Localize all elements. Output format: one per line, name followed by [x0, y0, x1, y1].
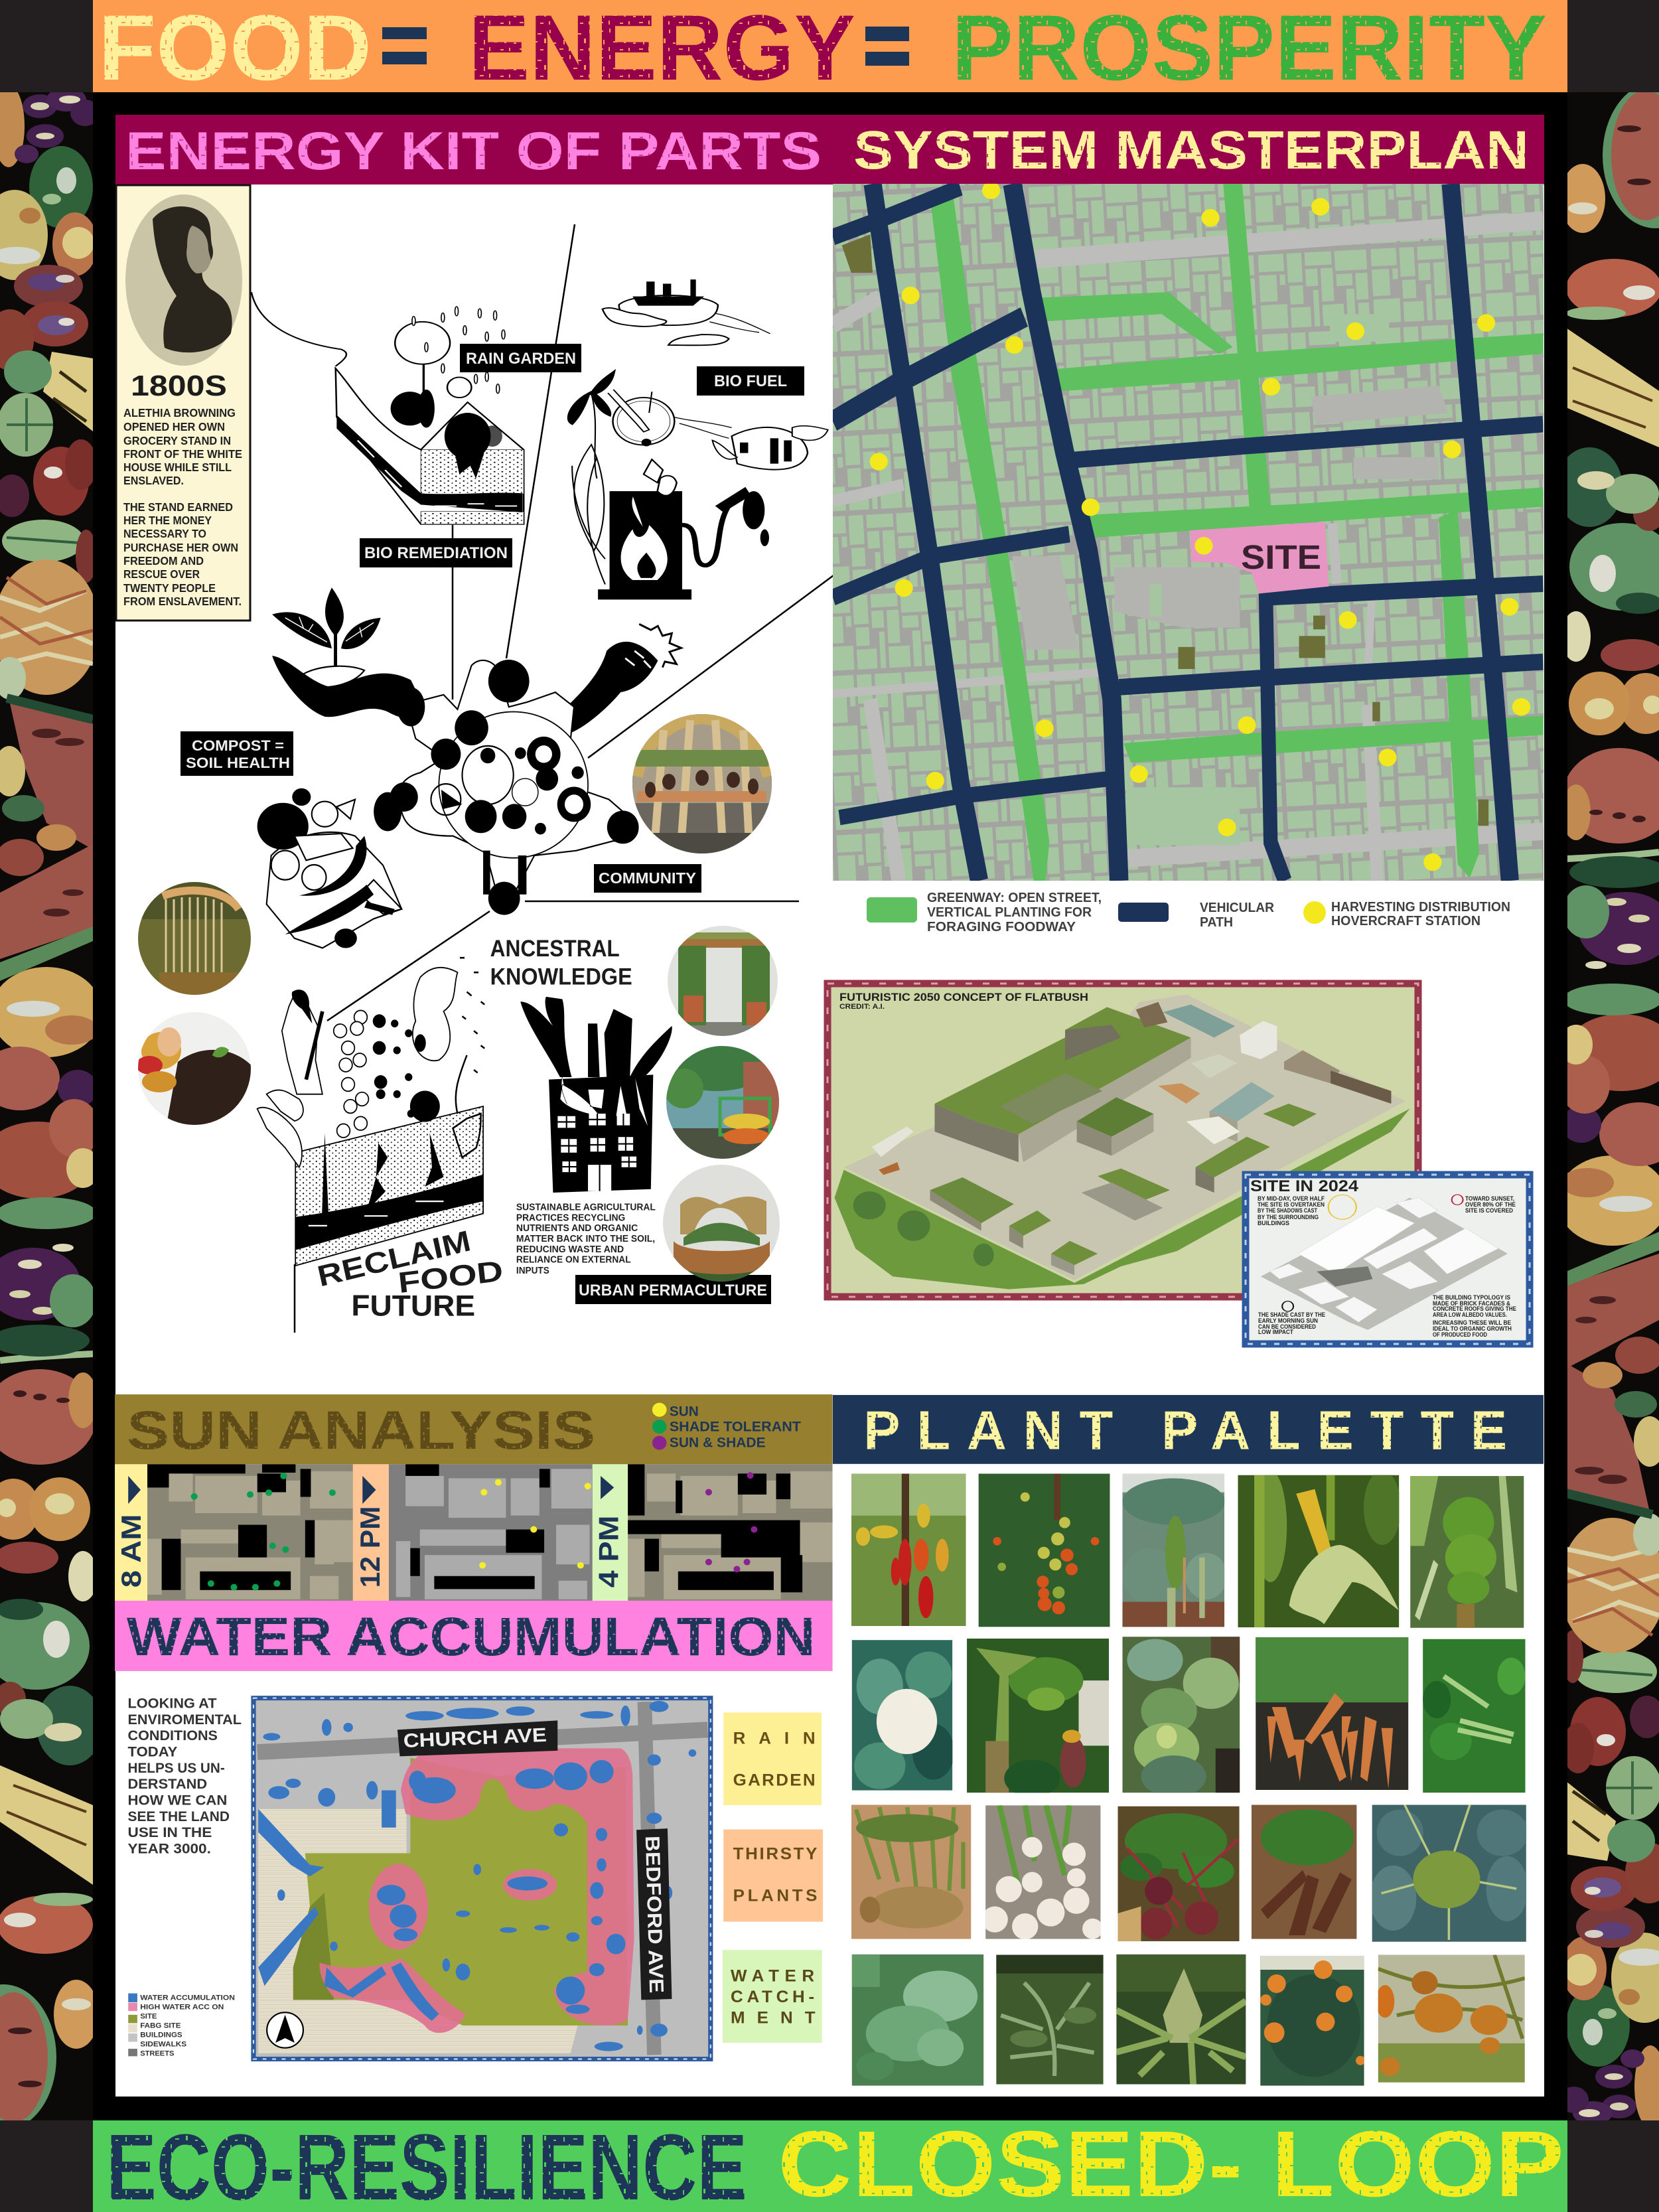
vehicular legend text: [1200, 901, 1275, 930]
vehicular legend text: PATH: [1200, 915, 1233, 930]
photo: cauliflower: [852, 1640, 953, 1791]
label: community: COMMUNITY: [599, 869, 696, 887]
tag: water catchment: CATCH-: [731, 1988, 814, 2006]
photo: banana tree: [967, 1639, 1109, 1793]
paragraph: sustainable agricultural practices: RELIANCE ON EXTERNAL: [516, 1254, 631, 1266]
greenway legend text: VERTICAL PLANTING FOR: [927, 905, 1092, 920]
paragraph: environmental conditions: ENVIROMENTAL: [128, 1712, 242, 1728]
date heading: 1800S: [131, 370, 227, 402]
label: rain garden: RAIN GARDEN: [466, 350, 576, 368]
inset annotations: BY THE SHADOWS CAST: [1258, 1207, 1317, 1215]
inset annotations: THE BUILDING TYPOLOGY IS: [1433, 1294, 1510, 1301]
station swatch: [1303, 901, 1326, 924]
label: bio remediation: BIO REMEDIATION: [364, 544, 508, 562]
tag: thirsty plants: PLANTS: [733, 1887, 817, 1905]
vehicular paths: [833, 184, 1543, 881]
inset annotations: BY MID-DAY, OVER HALF: [1258, 1195, 1325, 1203]
photo: peppers: [851, 1473, 966, 1626]
label: urban permaculture: URBAN PERMACULTURE: [579, 1282, 767, 1299]
flying planter: [603, 279, 770, 345]
plant palette header: PLANT PALETTE: [863, 1399, 1507, 1461]
photo: green beans: [1423, 1639, 1525, 1793]
paragraph: sustainable agricultural practices: [516, 1202, 656, 1276]
hovercraft: [674, 417, 828, 470]
photo: cilantro: [852, 1954, 983, 2086]
reclaim soil section: [257, 958, 484, 1266]
equals sign 1: [382, 27, 427, 64]
heading: energy kit of parts: ENERGY KIT OF PARTS: [125, 121, 822, 181]
hovercraft stations: [870, 182, 1530, 871]
heading: system masterplan: SYSTEM MASTERPLAN: [853, 120, 1529, 181]
history text: ALETHIA BROWNING: [123, 406, 236, 419]
paragraph: environmental conditions: SEE THE LAND: [128, 1808, 230, 1824]
photo: woven pavilion: [660, 1161, 783, 1284]
water accumulation header: WATER ACCUMULATION: [127, 1607, 816, 1667]
photo: compost soil: [138, 1012, 251, 1125]
photo: tomatoes: [978, 1473, 1110, 1627]
sun legend: [652, 1403, 801, 1450]
inset annotations: SITE IS COVERED: [1465, 1207, 1513, 1215]
water legend: SIDEWALKS: [140, 2041, 187, 2049]
site parcel: [1190, 522, 1329, 593]
sun legend: SUN: [670, 1404, 699, 1419]
tag: water catchment: M E N T: [731, 2009, 816, 2027]
portrait of Alethia Browning: [125, 194, 242, 366]
inset annotations: CONCRETE ROOFS GIVING THE: [1433, 1305, 1516, 1313]
tag: rain garden: GARDEN: [733, 1771, 816, 1789]
time tab: 8 AM: [115, 1464, 147, 1601]
greenways: [931, 184, 1543, 881]
water legend: BUILDINGS: [140, 2031, 182, 2039]
street label: bedford ave: [636, 1828, 672, 2000]
tag: thirsty plants: [723, 1830, 823, 1921]
photo: cannabis: [1116, 1954, 1246, 2085]
paragraph: environmental conditions: HOW WE CAN: [128, 1793, 227, 1808]
hand holding seedling: [272, 587, 425, 718]
photo: cassava: [1252, 1805, 1356, 1939]
inset title: SITE IN 2024: [1250, 1177, 1359, 1195]
water legend: SITE: [140, 2013, 157, 2020]
panel: site in 2024 inset: [1246, 1175, 1530, 1344]
tag: rain garden: R A I N: [733, 1730, 816, 1747]
concept image caption: [839, 991, 1088, 1011]
history text: OPENED HER OWN: [123, 420, 225, 433]
history text: FROM ENSLAVEMENT.: [123, 595, 242, 608]
photo: ginger: [851, 1805, 972, 1939]
history text: FRONT OF THE WHITE: [123, 447, 242, 461]
photo: citrus: [1260, 1956, 1365, 2086]
tag: water catchment: WATER: [731, 1967, 814, 1985]
reclaim food future lettering: FOOD: [397, 1255, 504, 1299]
label: bio fuel: BIO FUEL: [714, 372, 787, 390]
history text: NECESSARY TO: [123, 527, 206, 540]
label: bio fuel: [697, 366, 804, 396]
white content panel: [115, 184, 1544, 2097]
ancestral knowledge lettering: [490, 936, 632, 990]
illustrations: community table, hands, compost and reclaim: [257, 587, 681, 1323]
history text: RESCUE OVER: [123, 567, 200, 581]
photo: green bananas: [1410, 1476, 1524, 1628]
illustration: rain garden block: [252, 292, 524, 524]
panel: plant palette: [833, 1395, 1544, 2086]
label: compost = soil health: [180, 731, 293, 776]
greenway legend text: GREENWAY: OPEN STREET,: [927, 891, 1102, 905]
water legend: FABG SITE: [140, 2022, 181, 2029]
inset annotations: TOWARD SUNSET,: [1465, 1195, 1514, 1203]
history text: HOUSE WHILE STILL: [123, 461, 232, 474]
water accumulation spots: [258, 1701, 696, 2051]
paragraph: environmental conditions: TODAY: [128, 1744, 177, 1759]
high water areas: [319, 1748, 634, 2033]
concept image caption: FUTURISTIC 2050 CONCEPT OF FLATBUSH: [839, 991, 1088, 1003]
photo: rosemary: [996, 1954, 1104, 2085]
site label: SITE: [1241, 538, 1321, 576]
inset annotations: CAN BE CONSIDERED: [1258, 1323, 1316, 1331]
farmer figure: [282, 990, 323, 1094]
history text: ENSLAVED.: [123, 474, 184, 487]
paragraph: environmental conditions: HELPS US UN-: [128, 1760, 225, 1776]
paragraph: environmental conditions: CONDITIONS: [128, 1728, 218, 1743]
water legend: [128, 1994, 235, 2058]
concept image caption: CREDIT: A.I.: [839, 1003, 885, 1011]
fist raised with fork: [546, 624, 681, 736]
time tab: 4 PM: 4 PM: [593, 1516, 624, 1587]
inset annotations: BUILDINGS: [1258, 1220, 1289, 1227]
panel: 1800s history card: [116, 185, 250, 621]
time tab: 4 PM: [593, 1464, 628, 1601]
photo: street market: [664, 1045, 783, 1161]
label: bio remediation: [360, 538, 512, 567]
reclaim food future lettering: FUTURE: [351, 1290, 475, 1323]
fabric strip: left fruit pattern: [0, 85, 103, 2130]
planted rows: [257, 968, 457, 1167]
time tab: 8 AM: 8 AM: [115, 1514, 147, 1587]
tag: rain garden: [723, 1712, 822, 1805]
top banner: [93, 0, 1567, 100]
compass north arrow: [267, 2012, 303, 2048]
paragraph: environmental conditions: YEAR 3000.: [128, 1841, 211, 1856]
paragraph: sustainable agricultural practices: INPUTS: [516, 1266, 549, 1276]
photo: beets: [1118, 1806, 1240, 1941]
shadow map: 4 PM: [628, 1464, 833, 1601]
community table with people: [374, 660, 639, 915]
inset annotations: BY THE SURROUNDING: [1258, 1214, 1319, 1221]
inset annotations: THE SHADE CAST BY THE: [1258, 1311, 1325, 1319]
dark olive lots: [842, 234, 1488, 826]
inset annotations: EARLY MORNING SUN: [1258, 1317, 1318, 1325]
history text: FREEDOM AND: [123, 554, 204, 567]
paragraph: sustainable agricultural practices: PRACTICES RECYCLING: [516, 1213, 625, 1224]
water legend: STREETS: [140, 2050, 175, 2058]
paragraph: sustainable agricultural practices: SUSTAINABLE AGRICULTURAL: [516, 1202, 656, 1213]
sun legend: SHADE TOLERANT: [670, 1419, 801, 1434]
bottom banner: [93, 2111, 1567, 2212]
sun analysis header: SUN ANALYSIS: [127, 1400, 595, 1461]
tag: water catchment: [723, 1950, 822, 2043]
water legend: HIGH WATER ACC ON: [140, 2004, 224, 2011]
street label: church ave: CHURCH AVE: [403, 1724, 547, 1752]
label: rain garden: [460, 344, 581, 372]
inset annotations: THE SITE IS OVERTAKEN: [1258, 1201, 1325, 1209]
photo: community dome: [630, 713, 776, 859]
tag: thirsty plants: THIRSTY: [733, 1845, 817, 1863]
photo: squash: [1376, 1954, 1525, 2083]
water legend: WATER ACCUMULATION: [140, 1994, 235, 2002]
inset annotations: AREA LOW ALBEDO VALUES.: [1433, 1311, 1507, 1319]
fabric strip: right fruit pattern: [1556, 82, 1659, 2128]
greenway swatch: [867, 897, 917, 922]
inset annotations: IDEAL TO ORGANIC GROWTH: [1433, 1325, 1512, 1333]
sun legend: SUN & SHADE: [670, 1435, 766, 1450]
label: compost = soil health: SOIL HEALTH: [186, 755, 290, 771]
sun analysis header: [115, 1394, 833, 1464]
panel: futuristic 2050 concept image: [828, 984, 1418, 1297]
photo: vegetable arch: [667, 926, 780, 1042]
panel: sun analysis and water accumulation: [115, 1394, 833, 2059]
photo: cabbage: [1123, 1637, 1240, 1793]
greenway legend text: FORAGING FOODWAY: [927, 920, 1076, 934]
history text: TWENTY PEOPLE: [123, 581, 216, 595]
illustration: building bag with vegetables: [520, 997, 672, 1193]
history text: PURCHASE HER OWN: [123, 541, 238, 554]
inset annotations: LOW IMPACT: [1258, 1329, 1293, 1336]
shadow map: 12 PM: [389, 1464, 593, 1601]
history text: [123, 406, 242, 608]
section header band: [115, 115, 1544, 184]
equals sign 2: [865, 27, 909, 66]
time tab: 12 PM: 12 PM: [355, 1506, 386, 1587]
connector lines: [295, 224, 833, 1333]
photo: broccoli: [1370, 1805, 1528, 1942]
inset annotations: OF PRODUCED FOOD: [1433, 1331, 1487, 1339]
paragraph: environmental conditions: USE IN THE: [128, 1824, 212, 1840]
ancestral knowledge lettering: KNOWLEDGE: [490, 964, 632, 990]
paragraph: environmental conditions: DERSTAND: [128, 1776, 207, 1792]
isometric green city: [835, 994, 1410, 1290]
inset annotations: OVER 80% OF THE: [1465, 1201, 1516, 1209]
station legend text: [1331, 900, 1510, 928]
photo: carrots: [1256, 1637, 1408, 1790]
time tab: 12 PM: [353, 1464, 389, 1601]
vehicular swatch: [1118, 903, 1169, 922]
history text: GROCERY STAND IN: [123, 434, 231, 447]
water accumulation map: [253, 1698, 711, 2059]
light streets and courtyards: [833, 220, 1543, 881]
history text: THE STAND EARNED: [123, 500, 233, 514]
paragraph: environmental conditions: LOOKING AT: [128, 1696, 217, 1711]
greenway legend text: [927, 891, 1102, 934]
inset annotations: [1258, 1195, 1516, 1339]
photo: woven comb planter: [138, 882, 251, 995]
map legend: [867, 891, 1510, 934]
paragraph: sustainable agricultural practices: MATTER BACK INTO THE SOIL,: [516, 1234, 655, 1244]
isometric existing site: [1261, 1195, 1508, 1330]
paragraph: sustainable agricultural practices: NUTRIENTS AND ORGANIC: [516, 1223, 638, 1234]
shadow map: 8 AM: [147, 1464, 353, 1601]
paragraph: environmental conditions: [128, 1696, 242, 1856]
label: urban permaculture: [575, 1275, 771, 1304]
photo: brussels sprouts: [1123, 1473, 1225, 1627]
label: compost = soil health: COMPOST =: [192, 737, 284, 754]
street label: bedford ave: BEDFORD AVE: [641, 1836, 668, 1994]
station legend text: HARVESTING DISTRIBUTION: [1331, 900, 1510, 915]
street label: church ave: [397, 1720, 557, 1756]
paragraph: sustainable agricultural practices: REDUCING WASTE AND: [516, 1244, 624, 1255]
history text: HER THE MONEY: [123, 514, 212, 527]
illustration: bio fuel pump and hovercraft: [569, 279, 828, 599]
station legend text: HOVERCRAFT STATION: [1331, 914, 1480, 928]
ancestral knowledge lettering: ANCESTRAL: [490, 936, 620, 962]
inset annotations: MADE OF BRICK FACADES &: [1433, 1300, 1510, 1307]
reclaim food future lettering: RECLAIM: [315, 1224, 474, 1293]
panel: system masterplan map: [833, 182, 1544, 881]
inset annotations: INCREASING THESE WILL BE: [1433, 1319, 1511, 1327]
photo: corn: [1238, 1475, 1399, 1627]
compost pile: [257, 788, 401, 948]
label: community: [594, 864, 701, 893]
reclaim food future lettering: [315, 1224, 504, 1323]
photo: garlic: [981, 1805, 1103, 1939]
vehicular legend text: VEHICULAR: [1200, 901, 1275, 915]
